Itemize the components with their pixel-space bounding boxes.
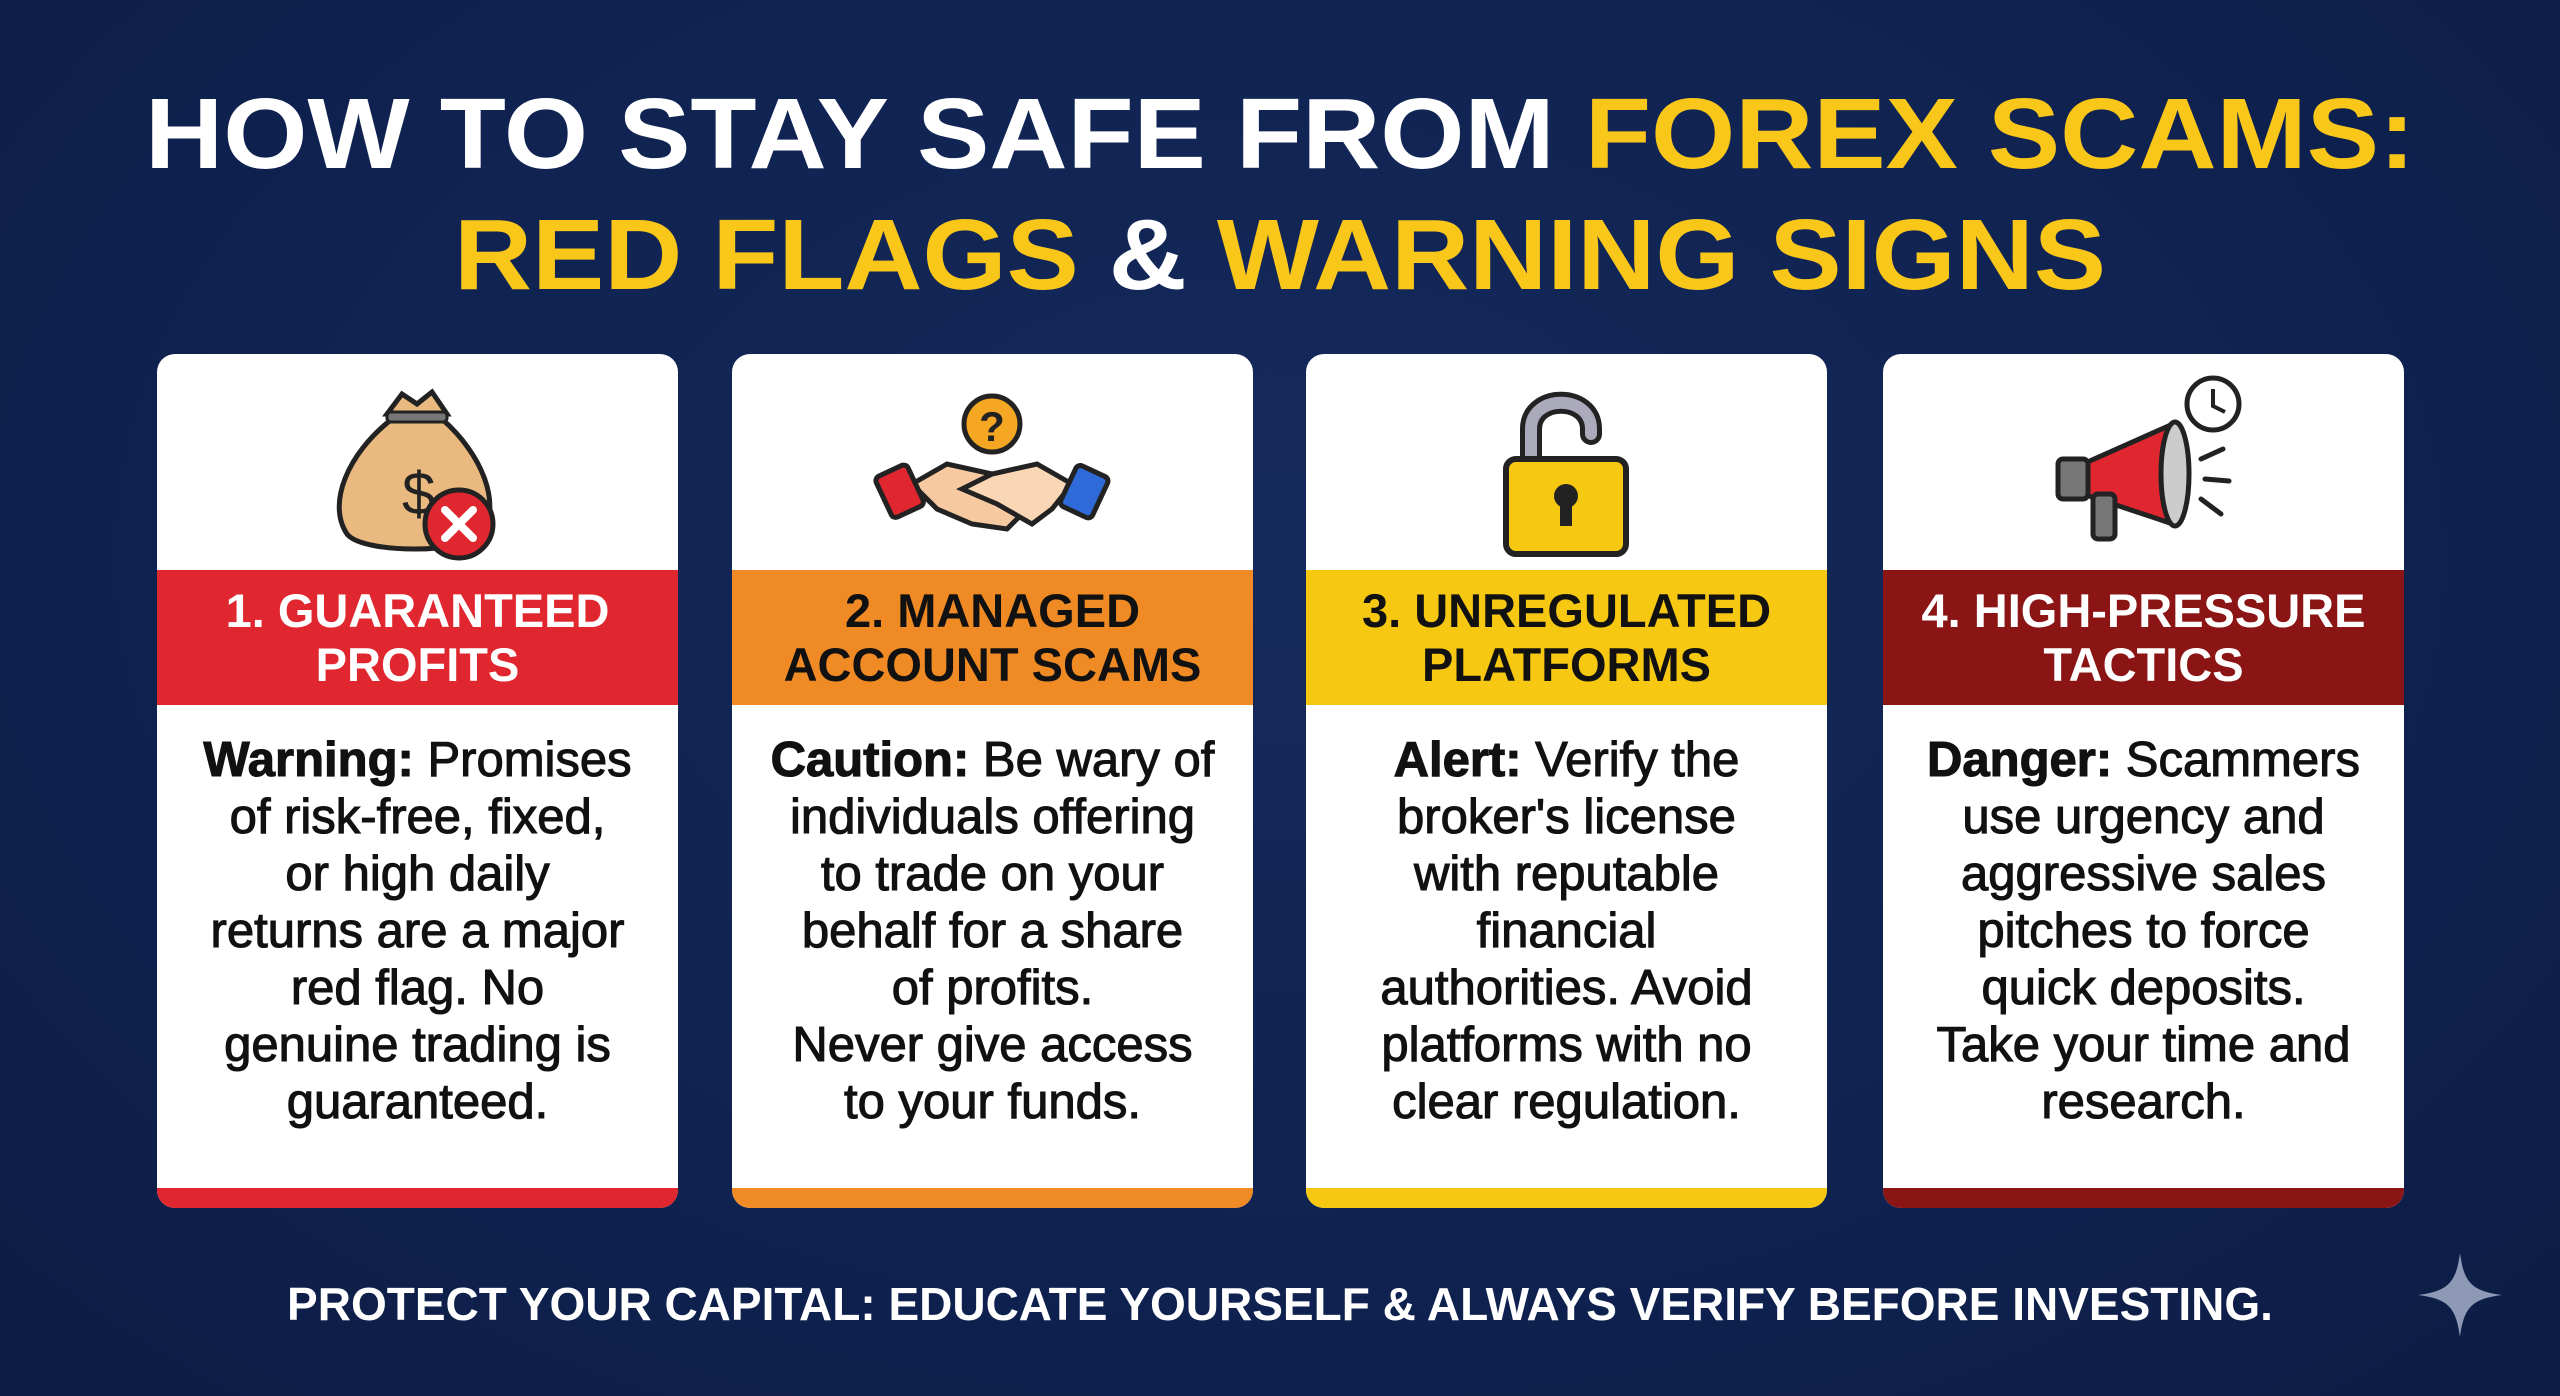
text: danger: use urgency and <box>1962 790 2325 844</box>
icon: sparkle <box>2418 1253 2502 1337</box>
header: guaranteed profits: PROFITS <box>316 638 519 690</box>
text: alert: broker's license <box>1397 790 1736 844</box>
header: high-pressure tactics <box>1883 570 2404 705</box>
text: warning: guaranteed. <box>287 1075 548 1129</box>
text: warning: genuine trading is <box>224 1018 611 1072</box>
text: warning <box>202 733 632 1129</box>
panel: unregulated platforms <box>1306 354 1827 1208</box>
header: unregulated platforms <box>1306 570 1827 705</box>
icon: open padlock <box>1503 392 1629 557</box>
text: caution: behalf for a share <box>802 904 1183 958</box>
text: warning: red flag. No <box>291 961 544 1015</box>
text: caution: Never give access <box>792 1018 1193 1072</box>
text: caution: Caution: Be wary of <box>771 733 1214 787</box>
text: warning: returns are a major <box>211 904 624 958</box>
header: managed account scams: 2. MANAGED <box>845 584 1140 636</box>
text: caution: to trade on your <box>821 847 1164 901</box>
icon: money bag <box>336 388 496 560</box>
text: alert: authorities. Avoid <box>1380 961 1753 1015</box>
header: high-pressure tactics: 4. HIGH-PRESSURE <box>1922 584 2365 636</box>
text: danger: research. <box>2041 1075 2246 1129</box>
icon: handshake <box>873 394 1110 532</box>
text: danger: Danger: Scammers <box>1927 733 2360 787</box>
panel: high-pressure tactics <box>1883 354 2404 1208</box>
text: danger: pitches to force <box>1977 904 2310 958</box>
header: guaranteed profits <box>157 570 678 705</box>
text: caution <box>771 733 1215 1129</box>
title: RED FLAGS & WARNING SIGNS <box>454 199 2106 311</box>
title <box>145 78 2415 311</box>
header: managed account scams: ACCOUNT SCAMS <box>784 638 1201 690</box>
icon: megaphone and clock <box>2056 376 2242 542</box>
header: high-pressure tactics: TACTICS <box>2043 638 2244 690</box>
header: guaranteed profits: 1. GUARANTEED <box>226 584 609 636</box>
text: alert: platforms with no <box>1381 1018 1752 1072</box>
text: warning: of risk-free, fixed, <box>230 790 605 844</box>
text: alert: Alert: Verify the <box>1394 733 1739 787</box>
text: caution: of profits. <box>892 961 1093 1015</box>
icon: handshake: ? <box>979 403 1005 450</box>
text: warning: Warning: Promises <box>203 733 632 787</box>
panel: guaranteed profits <box>157 354 678 1208</box>
header: unregulated platforms: 3. UNREGULATED <box>1362 584 1771 636</box>
header: unregulated platforms: PLATFORMS <box>1422 638 1711 690</box>
text: alert: clear regulation. <box>1392 1075 1741 1129</box>
text: danger: quick deposits. <box>1981 961 2306 1015</box>
text: alert: financial <box>1477 904 1656 958</box>
text: danger: aggressive sales <box>1961 847 2326 901</box>
panel: managed account scams <box>732 354 1253 1208</box>
text: alert <box>1380 733 1753 1129</box>
text: danger: Take your time and <box>1936 1018 2350 1072</box>
text: alert: with reputable <box>1414 847 1719 901</box>
footer: PROTECT YOUR CAPITAL: EDUCATE YOURSELF & ALWAYS VERIFY BEFORE INVESTING. <box>287 1278 2273 1330</box>
icon: money bag: $ <box>402 460 435 527</box>
header: managed account scams <box>732 570 1253 705</box>
title: HOW TO STAY SAFE FROM FOREX SCAMS: <box>145 78 2415 190</box>
text: caution: to your funds. <box>844 1075 1141 1129</box>
text: danger <box>1927 733 2360 1129</box>
text: warning: or high daily <box>285 847 550 901</box>
text: caution: individuals offering <box>790 790 1195 844</box>
